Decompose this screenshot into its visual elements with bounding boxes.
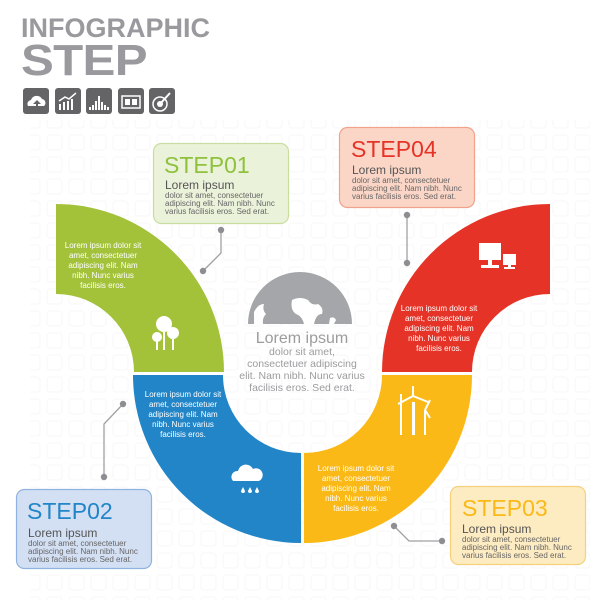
- text: red arc: [401, 304, 478, 353]
- center globe: [248, 272, 352, 324]
- icon: trees: [152, 316, 179, 350]
- text: green arc: facilisis eros.: [80, 281, 126, 290]
- connector: step02: [101, 401, 126, 480]
- box: STEP02: dolor sit amet, consectetuer: [28, 539, 127, 548]
- box: STEP01: Lorem ipsum: [165, 178, 234, 192]
- title: STEP: [21, 35, 148, 84]
- box: STEP04: dolor sit amet, consectetuer: [352, 176, 451, 185]
- text: red arc: facilisis eros.: [416, 344, 462, 353]
- icon: rain cloud: [231, 465, 263, 493]
- text: blue arc: amet, consectetuer: [149, 400, 217, 409]
- box: STEP03: adipiscing elit. Nam nibh. Nunc: [462, 543, 572, 552]
- text: red arc: Lorem ipsum dolor sit: [401, 304, 478, 313]
- center text: facilisis eros. Sed erat.: [249, 382, 355, 394]
- box: STEP03: varius facilisis eros. Sed erat.: [462, 551, 566, 560]
- text: yellow arc: adipiscing elit. Nam: [321, 484, 391, 493]
- box: STEP04: STEP04: [351, 136, 437, 162]
- box: STEP04: [340, 128, 474, 208]
- panel: red step04 arc: [382, 204, 550, 372]
- text: green arc: Lorem ipsum dolor sit: [65, 241, 142, 250]
- center text: dolor sit amet,: [269, 346, 335, 358]
- box: STEP02: Lorem ipsum: [28, 526, 97, 540]
- panel: blue step02 arc: [133, 375, 301, 543]
- icon: cloud upload: [23, 88, 49, 114]
- box: STEP01: [154, 144, 288, 224]
- text: green arc: amet, consectetuer: [69, 251, 137, 260]
- box: STEP01: dolor sit amet, consectetuer: [165, 191, 264, 200]
- box: STEP01: STEP01: [164, 152, 250, 178]
- box: STEP03: Lorem ipsum: [462, 522, 531, 536]
- text: yellow arc: amet, consectetuer: [322, 474, 390, 483]
- title: INFOGRAPHIC: [21, 13, 210, 43]
- box: STEP02: varius facilisis eros. Sed erat.: [28, 555, 132, 564]
- text: yellow arc: [318, 464, 395, 513]
- icon: bar chart: [86, 88, 112, 114]
- text: blue arc: adipiscing elit. Nam: [148, 410, 218, 419]
- icon: monitor: [118, 88, 144, 114]
- panel: green step01 arc: [56, 204, 224, 372]
- icon row: [23, 88, 175, 114]
- box: STEP01: adipiscing elit. Nam nibh. Nunc: [165, 199, 275, 208]
- text: green arc: adipiscing elit. Nam: [68, 261, 138, 270]
- title: [21, 13, 210, 84]
- text: green arc: [65, 241, 142, 290]
- box: STEP03: STEP03: [462, 495, 548, 521]
- box: STEP03: dolor sit amet, consectetuer: [462, 535, 561, 544]
- text: blue arc: nibh. Nunc varius: [152, 420, 214, 429]
- text: red arc: nibh. Nunc varius: [408, 334, 470, 343]
- box: STEP03: [450, 486, 586, 564]
- box: STEP02: STEP02: [27, 498, 113, 524]
- icon: target: [149, 88, 175, 114]
- center text: elit. Nam nibh. Nunc varius: [239, 370, 365, 382]
- box: STEP04: Lorem ipsum: [352, 163, 421, 177]
- icon: growth chart: [55, 88, 81, 114]
- text: green arc: nibh. Nunc varius: [72, 271, 134, 280]
- center text: consectetuer adipiscing: [247, 358, 357, 370]
- connector: step03: [391, 523, 445, 544]
- center text: [239, 330, 365, 394]
- text: blue arc: facilisis eros.: [160, 430, 206, 439]
- text: red arc: amet, consectetuer: [405, 314, 473, 323]
- box: STEP04: adipiscing elit. Nam nibh. Nunc: [352, 184, 462, 193]
- box: STEP02: [16, 490, 152, 568]
- box: STEP01: varius facilisis eros. Sed erat.: [165, 207, 269, 216]
- text: yellow arc: Lorem ipsum dolor sit: [318, 464, 395, 473]
- text: yellow arc: nibh. Nunc varius: [325, 494, 387, 503]
- text: blue arc: [145, 390, 222, 439]
- icon: solar panels: [479, 243, 516, 269]
- text: red arc: adipiscing elit. Nam: [404, 324, 474, 333]
- text: yellow arc: facilisis eros.: [333, 504, 379, 513]
- connector: step04: [404, 212, 410, 266]
- center text: Lorem ipsum: [256, 330, 348, 347]
- icon: wind turbines: [398, 386, 430, 435]
- box: STEP04: varius facilisis eros. Sed erat.: [352, 192, 456, 201]
- text: blue arc: Lorem ipsum dolor sit: [145, 390, 222, 399]
- connector: step01: [200, 227, 224, 274]
- panel: yellow step03 arc: [304, 375, 472, 543]
- box: STEP02: adipiscing elit. Nam nibh. Nunc: [28, 547, 138, 556]
